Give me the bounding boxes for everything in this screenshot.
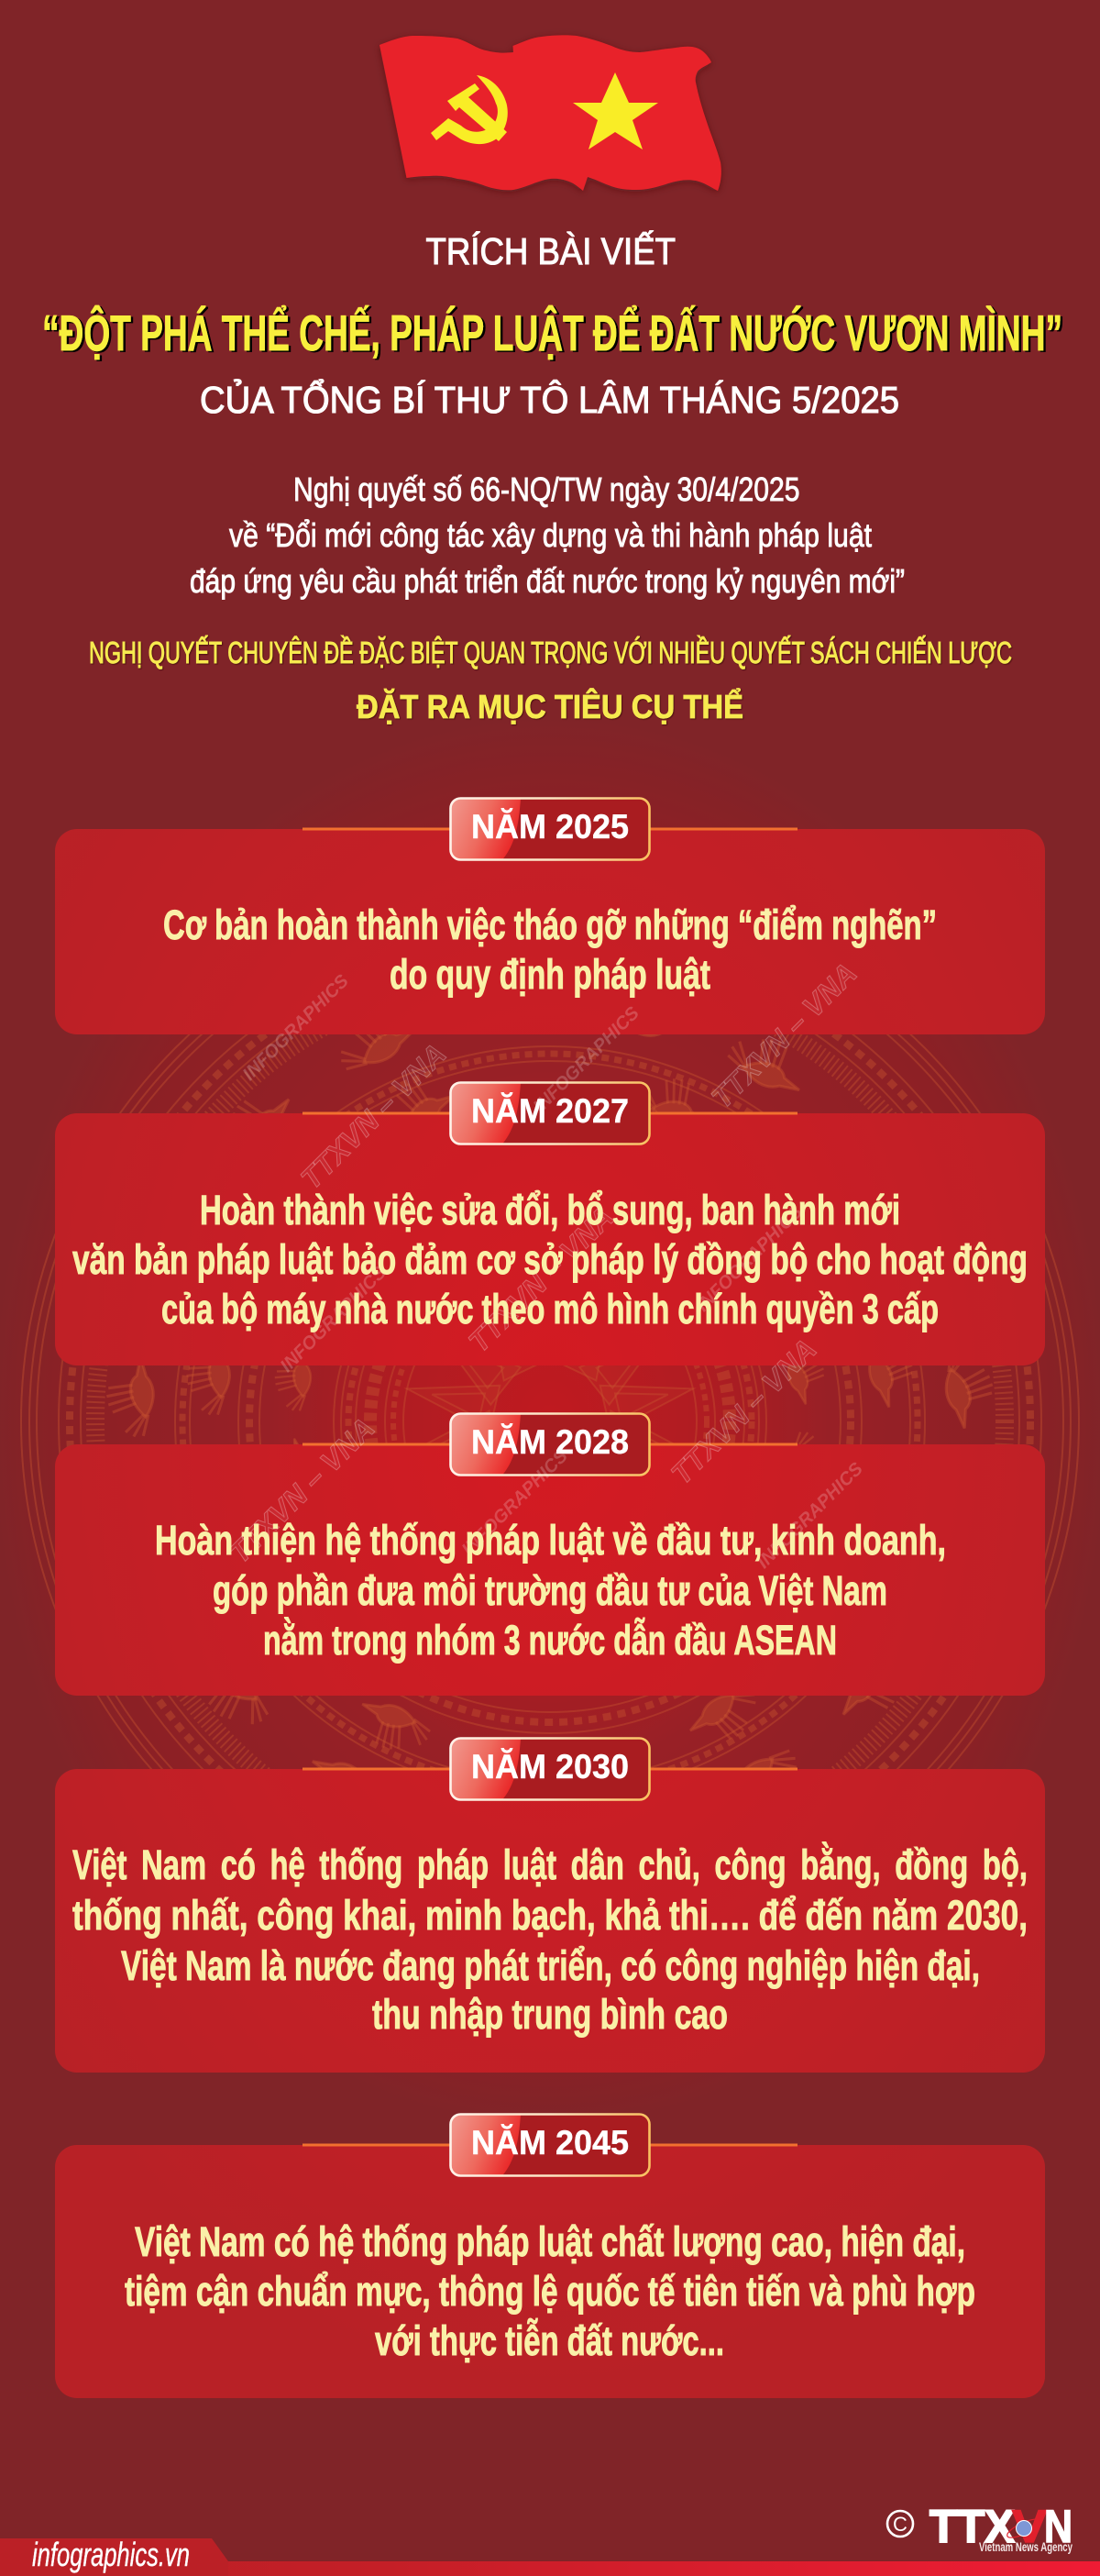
- heading: author and date: CỦA TỔNG BÍ THƯ TÔ LÂM THÁNG 5/2025: [200, 378, 899, 421]
- bronze drum pattern: [21, 892, 1079, 1951]
- watermarks: INFOGRAPHICS: [693, 1201, 807, 1316]
- year tag: 2028: [302, 1414, 798, 1475]
- text: 2025 goal: [163, 901, 937, 998]
- text: 2045 goal: [125, 2218, 975, 2364]
- text block: resolution details: Nghị quyết số 66-NQ/TW ngày 30/4/2025: [293, 470, 799, 508]
- watermarks: INFOGRAPHICS: [530, 1002, 644, 1117]
- panel: 2027: [55, 1113, 1045, 1365]
- panel: 2028: [55, 1444, 1045, 1696]
- logo: TTXVN agency mark: V: [1012, 2501, 1048, 2552]
- logo: TTXVN agency mark: TTX: [930, 2501, 1015, 2552]
- year tag: 2030: NĂM 2030: [471, 1748, 629, 1786]
- logo: TTXVN agency mark: C: [893, 2513, 908, 2536]
- footer bar: [0, 2536, 1100, 2576]
- year tag: 2028: NĂM 2028: [471, 1423, 629, 1461]
- text: 2028 goal: nằm trong nhóm 3 nước dẫn đầu ASEAN: [263, 1617, 837, 1664]
- watermarks: TTXVN – VNA: [294, 1037, 452, 1195]
- subheading: specific goals: ĐẶT RA MỤC TIÊU CỤ THỂ: [357, 687, 743, 725]
- text: 2025 goal: do quy định pháp luật: [390, 951, 710, 998]
- watermarks: TTXVN – VNA: [665, 1332, 822, 1490]
- watermarks: INFOGRAPHICS: [239, 970, 353, 1085]
- year tag: 2027: NĂM 2027: [471, 1092, 629, 1130]
- text: 2045 goal: với thực tiễn đất nước...: [375, 2317, 724, 2364]
- text block: resolution details: đáp ứng yêu cầu phát triển đất nước trong kỷ nguyên mới”: [190, 562, 905, 600]
- year tag: 2045: NĂM 2045: [471, 2124, 629, 2161]
- heading: excerpt label: TRÍCH BÀI VIẾT: [425, 230, 676, 272]
- watermarks: TTXVN – VNA: [223, 1411, 380, 1569]
- panel: 2030: [55, 1769, 1045, 2073]
- panel: 2025: [55, 829, 1045, 1034]
- watermarks: [223, 956, 867, 1573]
- text block: resolution details: về “Đổi mới công tác xây dựng và thi hành pháp luật: [229, 516, 872, 554]
- watermarks: TTXVN – VNA: [462, 1200, 620, 1358]
- year tag: 2045: [302, 2115, 798, 2175]
- icon: yellow star: [573, 72, 658, 149]
- text: 2028 goal: [155, 1517, 946, 1664]
- flag: [380, 35, 721, 191]
- footer site name: infographics.vn: [32, 2536, 190, 2573]
- year tag: 2025: NĂM 2025: [471, 808, 629, 846]
- watermarks: INFOGRAPHICS: [458, 1445, 572, 1560]
- watermarks: INFOGRAPHICS: [277, 1262, 390, 1376]
- text: 2027 goal: [72, 1187, 1028, 1332]
- text: 2030 goal: [72, 1841, 1028, 2038]
- year tag: 2025: [302, 798, 798, 860]
- year tag: 2027: [302, 1082, 798, 1144]
- text: 2030 goal: thu nhập trung bình cao: [372, 1991, 728, 2038]
- logo: TTXVN agency mark: [887, 2501, 1072, 2554]
- year tag: 2030: [302, 1739, 798, 1799]
- flag cloth: [380, 35, 721, 191]
- logo: TTXVN agency mark: N: [1044, 2501, 1072, 2552]
- watermarks: INFOGRAPHICS: [754, 1458, 867, 1573]
- panel: 2045: [55, 2145, 1045, 2398]
- watermarks: TTXVN – VNA: [705, 956, 863, 1114]
- icon: hammer and sickle: [431, 75, 508, 144]
- text block: resolution details: [190, 470, 905, 600]
